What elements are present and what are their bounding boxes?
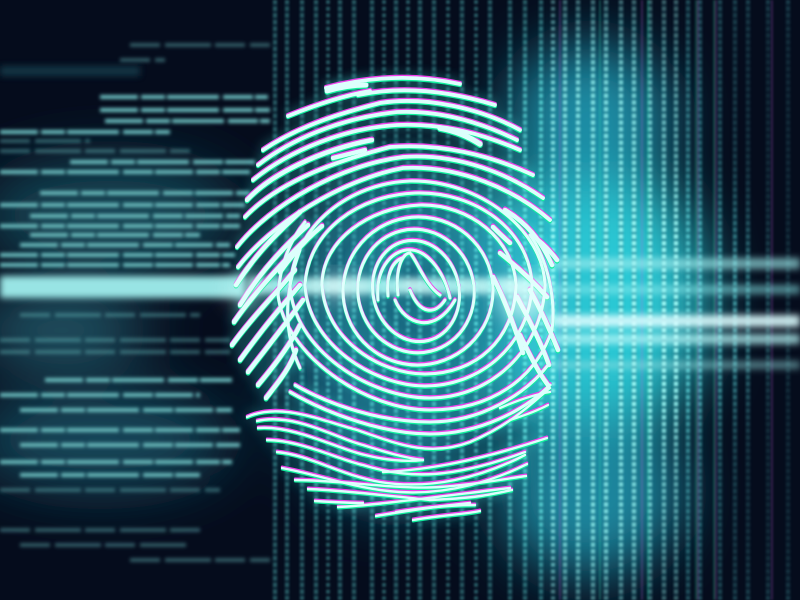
data stream: vertical dotted columns [275, 0, 788, 600]
data stream: horizontal text rows on the left [0, 45, 270, 560]
blurred dim block at the top left [0, 66, 140, 76]
fingerprint green fringe [232, 79, 558, 521]
fingerprint ridges [232, 78, 558, 520]
fingerprint magenta fringe [232, 77, 558, 519]
fingerprint glow [232, 78, 558, 520]
horizontal light bands [0, 258, 800, 369]
fingerprint hot spots [231, 278, 549, 322]
accent lines: magenta and green column fringes [560, 0, 772, 600]
teal glow field behind the data [0, 45, 705, 575]
fingerprint [231, 77, 558, 521]
